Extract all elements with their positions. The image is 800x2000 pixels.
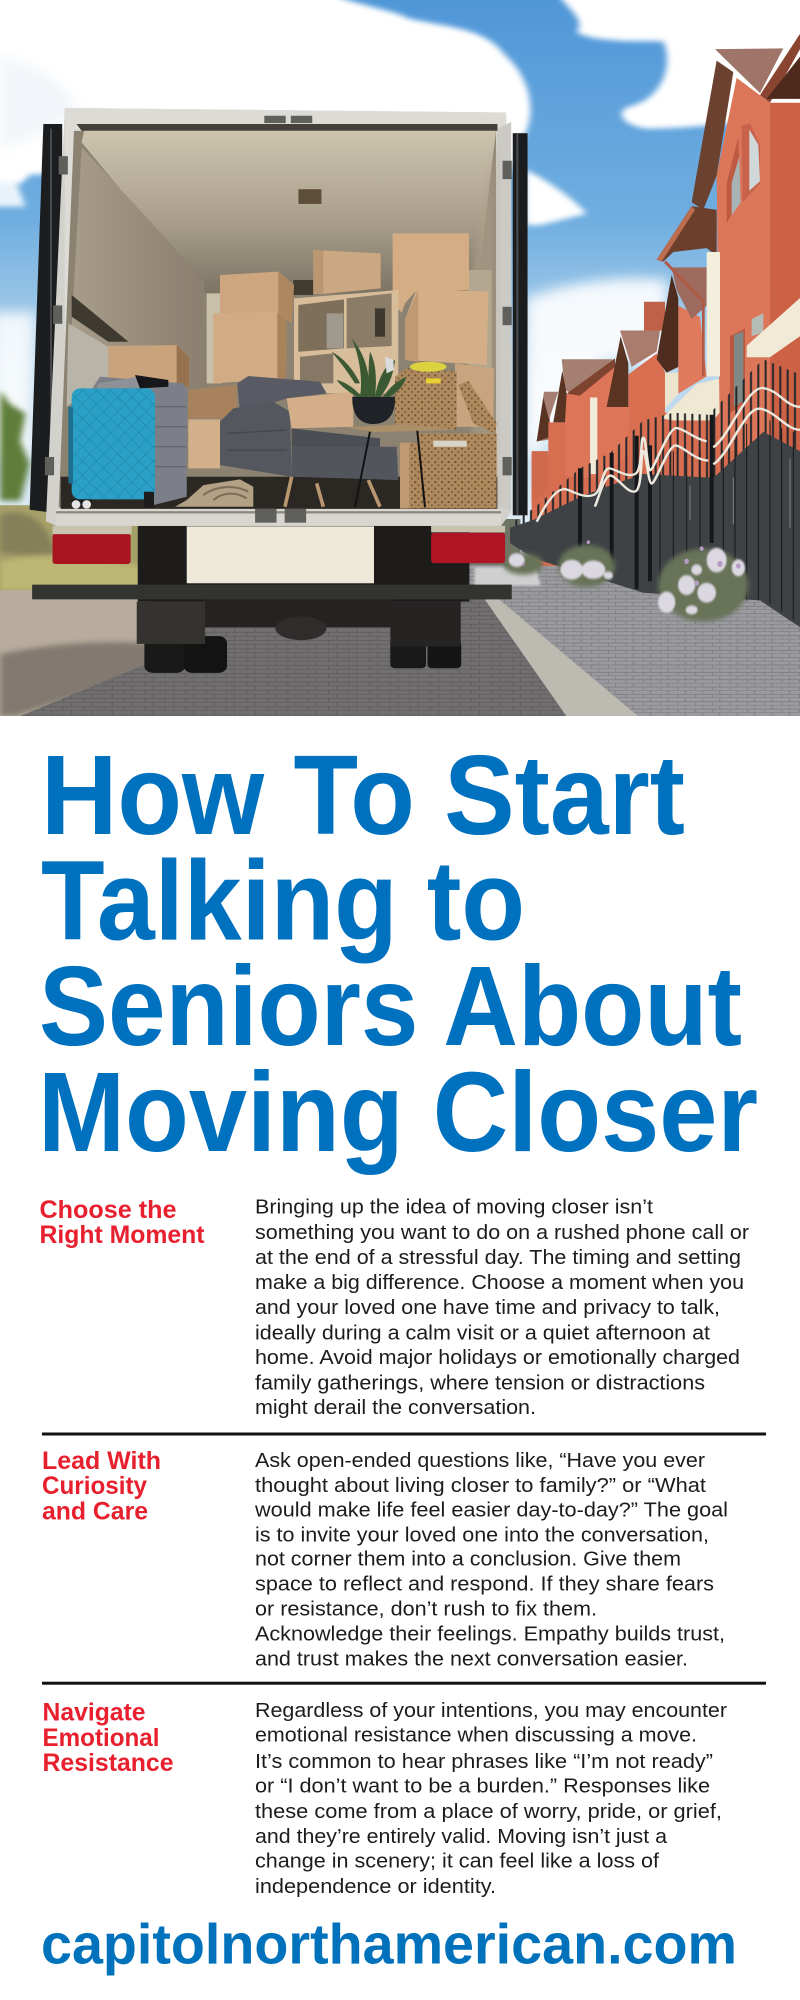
heading: navigate emotional resistance: Navigate: [42, 1699, 146, 1727]
divider 1: [42, 1432, 766, 1436]
body text: lead with curiosity and care: would make life feel easier day-to-day?” The goal: [254, 1500, 728, 1522]
far houses: [532, 392, 566, 503]
body text: choose the right moment: family gatherings, where tension or distractions: [255, 1373, 705, 1395]
truck: [30, 108, 528, 673]
body text: navigate emotional resistance: independence or identity.: [255, 1876, 496, 1898]
grey armchair: [220, 376, 398, 507]
cartons: [108, 233, 494, 468]
section 2: lead with curiosity and care: [42, 1447, 728, 1671]
cargo: [61, 233, 497, 509]
body text: navigate emotional resistance: emotional resistance when discussing a move.: [255, 1725, 697, 1747]
side table: [347, 424, 457, 507]
body text: navigate emotional resistance: these come from a place of worry, pride, or grief,: [255, 1801, 722, 1823]
heading: navigate emotional resistance: Emotional: [42, 1724, 160, 1752]
body text: navigate emotional resistance: Regardless of your intentions, you may encounter: [255, 1700, 727, 1722]
body text: lead with curiosity and care: Acknowledge their feelings. Empathy builds trust,: [255, 1623, 725, 1645]
body text: navigate emotional resistance: or “I don’t want to be a burden.” Responses like: [255, 1776, 710, 1798]
potted plant: [332, 338, 407, 424]
body text: choose the right moment: something you want to do on a rushed phone call or: [255, 1222, 749, 1244]
body text: choose the right moment: [255, 1196, 749, 1419]
rear open carton: [287, 392, 353, 428]
patterned boxes: [395, 362, 497, 508]
main house: [657, 34, 800, 451]
undercarriage: [137, 524, 469, 673]
body text: choose the right moment: ideally during a calm visit or a quiet afternoon at: [255, 1323, 710, 1345]
blue suitcase: [68, 388, 155, 509]
title: [38, 732, 758, 1175]
box frame: [46, 108, 511, 526]
second house: [657, 262, 724, 420]
row of brick houses: [510, 34, 800, 627]
kerb: [485, 599, 638, 716]
heading: navigate emotional resistance: Resistance: [42, 1749, 174, 1777]
hero photo: moving truck on residential street: [0, 0, 800, 716]
section 3: navigate emotional resistance: [42, 1699, 727, 1898]
back wall and panels: [67, 323, 108, 407]
body text: choose the right moment: and your loved one have time and privacy to talk,: [255, 1297, 720, 1319]
body text: navigate emotional resistance: change in scenery; it can feel like a loss of: [255, 1851, 659, 1873]
body text: choose the right moment: Bringing up the idea of moving closer isn’t: [255, 1196, 653, 1218]
body text: lead with curiosity and care: Ask open-ended questions like, “Have you ever: [255, 1450, 705, 1472]
fourth house: [553, 358, 628, 478]
body text: choose the right moment: make a big difference. Choose a moment when you: [255, 1272, 744, 1294]
body text: lead with curiosity and care: not corner them into a conclusion. Give them: [255, 1549, 681, 1571]
heading: lead with curiosity and care: Curiosity: [42, 1472, 147, 1500]
body text: choose the right moment: at the end of a stressful day. The timing and setting: [255, 1247, 741, 1269]
tail lights: [53, 526, 505, 564]
heading: choose the right moment: Right Moment: [40, 1221, 205, 1249]
body text: navigate emotional resistance: It’s common to hear phrases like “I’m not ready”: [255, 1751, 713, 1773]
rear bumper: [32, 585, 512, 599]
body text: navigate emotional resistance: and they’re entirely valid. Moving isn’t just a: [255, 1826, 668, 1848]
body text: navigate emotional resistance: [255, 1700, 727, 1898]
title: Seniors About: [39, 943, 742, 1069]
body text: lead with curiosity and care: and trust makes the next conversation easier.: [255, 1649, 688, 1671]
title: Talking to: [41, 838, 525, 964]
ground: grass, gravel: [0, 505, 153, 716]
body text: lead with curiosity and care: or resistance, don’t rush to fix them.: [255, 1598, 597, 1620]
third house: [606, 302, 678, 428]
heading: lead with curiosity and care: and Care: [42, 1497, 148, 1525]
tree on left: [0, 390, 30, 501]
body text: lead with curiosity and care: space to reflect and respond. If they share fears: [255, 1574, 714, 1596]
body text: lead with curiosity and care: is to invite your loved one into the conversation,: [255, 1525, 709, 1547]
body text: lead with curiosity and care: [254, 1450, 728, 1671]
pavement: [459, 519, 800, 716]
section 1: choose the right moment: [40, 1196, 749, 1419]
road: [20, 597, 571, 716]
right door: [513, 133, 528, 515]
flower bushes: [503, 540, 748, 621]
body text: lead with curiosity and care: thought about living closer to family?” or “What: [255, 1475, 706, 1497]
fence wave ornaments: [537, 388, 800, 522]
title: How To Start: [41, 732, 685, 858]
title: Moving Closer: [38, 1049, 758, 1175]
licence plate panel: [187, 526, 374, 583]
body text: choose the right moment: might derail the conversation.: [255, 1397, 536, 1419]
heading: navigate emotional resistance: [42, 1699, 174, 1777]
wall mass behind fence: [532, 412, 800, 566]
divider 2: [42, 1682, 766, 1685]
shelving unit: [294, 290, 398, 393]
heading: lead with curiosity and care: Lead With: [42, 1447, 161, 1475]
large carton right: [405, 288, 488, 365]
body text: choose the right moment: home. Avoid major holidays or emotionally charged: [255, 1347, 740, 1369]
rolled rug: [175, 479, 253, 507]
heading: choose the right moment: Choose the: [40, 1196, 177, 1224]
iron fence: [510, 359, 800, 627]
grey hard suitcase: [93, 375, 187, 505]
sill and hinges: [56, 509, 501, 526]
heading: lead with curiosity and care: [42, 1447, 161, 1525]
website url: capitolnorthamerican.com: [41, 1912, 737, 1976]
sky: [0, 0, 800, 551]
clouds: [0, 0, 800, 459]
interior walls and ceiling: [59, 131, 496, 507]
left door: [30, 124, 62, 512]
heading: choose the right moment: [40, 1196, 205, 1249]
